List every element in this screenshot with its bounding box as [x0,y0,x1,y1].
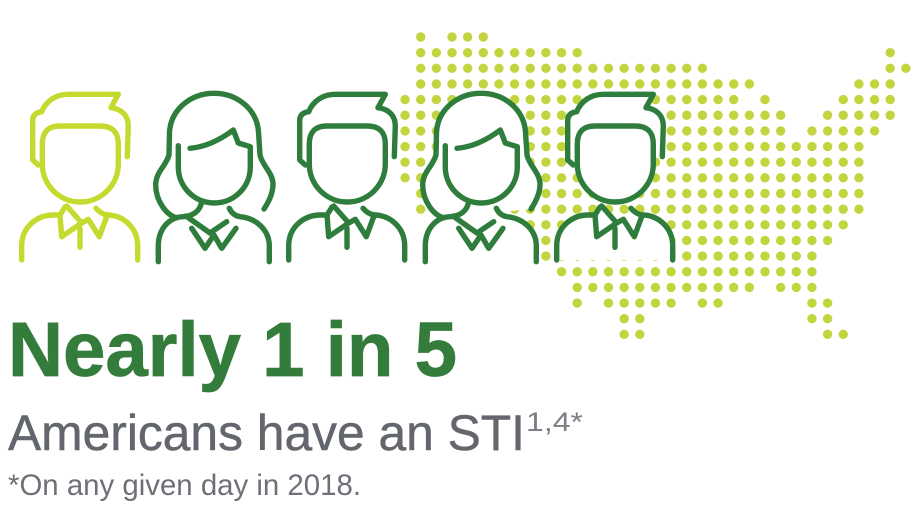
person 3: man [289,94,405,260]
dot map of the United States [405,37,906,334]
person 5: man [557,94,673,260]
footnote: *On any given day in 2018. [8,469,361,502]
superscript references: 1,4* [526,407,584,437]
subheading: Americans have an STI [8,405,525,461]
headline: Nearly 1 in 5 [8,307,457,393]
person 4: woman [423,93,540,262]
person 2: woman [156,93,273,262]
person 1: highlighted man [22,94,138,260]
